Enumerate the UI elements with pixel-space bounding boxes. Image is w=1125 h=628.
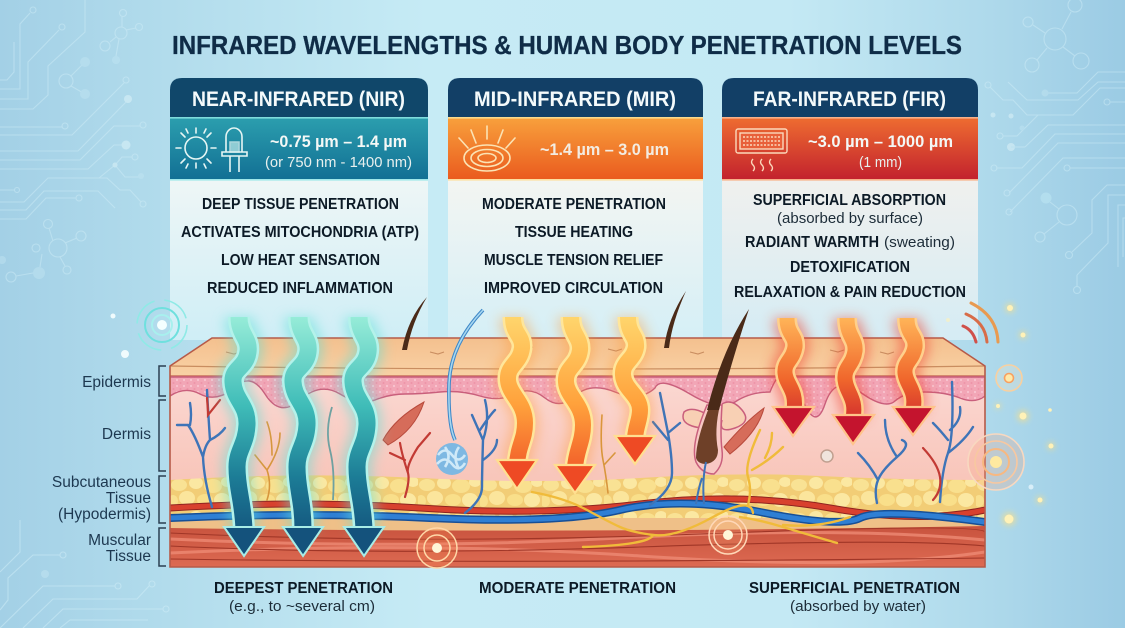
benefits list: DETOXIFICATION — [790, 259, 910, 276]
icon: sun — [176, 128, 216, 168]
heading: MIR: MID-INFRARED (MIR) — [474, 88, 676, 111]
skin surface — [170, 338, 985, 378]
heading: FIR: FAR-INFRARED (FIR) — [753, 88, 946, 111]
wavelength in nm: (or 750 nm - 1400 nm) — [265, 154, 412, 171]
arrows: near-infrared deepest penetration — [224, 317, 384, 556]
arrows: far-infrared superficial penetration — [773, 318, 934, 444]
footer: deepest penetration — [214, 580, 393, 615]
decorative circuit lines left — [0, 0, 146, 282]
hairs — [402, 291, 749, 410]
label: subcutaneous tissue — [52, 474, 151, 523]
arrow 1 — [773, 318, 814, 436]
footer: superficial penetration: (absorbed by water) — [790, 598, 926, 615]
decorative circuit lines right — [985, 0, 1125, 294]
panel: near-infrared — [170, 78, 428, 340]
icon: heater — [736, 129, 787, 171]
panel: far-infrared — [722, 78, 978, 340]
benefits list: IMPROVED CIRCULATION — [484, 280, 663, 297]
dermis — [170, 378, 985, 488]
footer: superficial penetration: SUPERFICIAL PENETRATION — [749, 580, 960, 597]
arrow 2 — [283, 317, 323, 556]
benefits list: RELAXATION & PAIN REDUCTION — [734, 284, 966, 301]
wavelength in mm: (1 mm) — [859, 154, 902, 171]
wavelength range: ~1.4 µm – 3.0 µm — [540, 140, 669, 159]
blood vessels — [170, 499, 985, 517]
icon: cyan energy rings — [110, 300, 187, 358]
layer brackets — [159, 366, 166, 566]
subcutaneous fat — [170, 474, 984, 518]
footer: superficial penetration — [749, 580, 960, 615]
icon: muscle energy spot right — [709, 516, 747, 554]
arrector muscle left — [383, 402, 424, 445]
dermal capillaries red — [207, 398, 940, 500]
wavelength range: ~0.75 µm – 1.4 µm — [270, 132, 407, 151]
benefits list: MUSCLE TENSION RELIEF — [484, 252, 663, 269]
icon: heat signal arcs — [963, 303, 998, 342]
label: epidermis: Epidermis — [82, 374, 151, 391]
arrow 3 — [893, 318, 934, 435]
glowing particles — [946, 303, 1055, 526]
benefits list: TISSUE HEATING — [515, 224, 633, 241]
arrow 1 — [497, 317, 537, 489]
benefits list — [181, 196, 419, 297]
label: subcutaneous tissue: Subcutaneous — [52, 474, 151, 491]
wavelength range: ~3.0 µm – 1000 µm — [808, 132, 953, 151]
layer labels — [52, 366, 166, 566]
epidermis wavy band — [170, 378, 984, 416]
benefits list: ACTIVATES MITOCHONDRIA (ATP) — [181, 224, 419, 241]
label: muscular tissue — [88, 532, 151, 565]
arrow 1 — [224, 317, 264, 556]
arrows: mid-infrared moderate penetration — [497, 317, 655, 493]
sebaceous glands — [683, 409, 708, 428]
label: subcutaneous tissue: (Hypodermis) — [58, 506, 151, 523]
arrow 2 — [555, 317, 595, 493]
icon: LED — [222, 128, 247, 172]
dermal capillaries blue — [177, 382, 973, 513]
hair follicle — [694, 405, 722, 474]
label: subcutaneous tissue: Tissue — [106, 490, 151, 507]
panel: mid-infrared — [448, 78, 703, 340]
arrector muscle right — [724, 408, 764, 454]
dermal nerve green — [328, 407, 334, 500]
benefits list: SUPERFICIAL ABSORPTION — [753, 192, 946, 209]
muscle — [170, 526, 985, 567]
icon: heat rings — [459, 126, 515, 171]
nerves — [532, 430, 850, 547]
benefits list — [734, 192, 966, 301]
arrow 3 — [615, 317, 655, 464]
arrow 2 — [833, 318, 874, 444]
dermal nerves orange — [255, 415, 615, 500]
benefits list: (absorbed by surface) — [777, 210, 923, 227]
benefits list — [482, 196, 666, 297]
label: dermis: Dermis — [102, 426, 151, 443]
benefits list: MODERATE PENETRATION — [482, 196, 666, 213]
tan fascia band — [170, 518, 985, 532]
icon: muscle energy spot left — [417, 528, 457, 568]
dermal cyst — [821, 450, 833, 462]
footer: moderate penetration: MODERATE PENETRATION — [479, 580, 676, 597]
benefits list: (sweating) — [884, 234, 955, 251]
footer: deepest penetration: DEEPEST PENETRATION — [214, 580, 393, 597]
footer: deepest penetration: (e.g., to ~several cm) — [229, 598, 375, 615]
block outline — [170, 338, 985, 567]
benefits list: REDUCED INFLAMMATION — [207, 280, 393, 297]
skin cross-section — [170, 291, 985, 567]
benefits list: DEEP TISSUE PENETRATION — [202, 196, 399, 213]
arrow 3 — [344, 317, 384, 556]
label: muscular tissue: Tissue — [106, 548, 151, 565]
icon: heat rings right — [968, 365, 1024, 490]
title: INFRARED WAVELENGTHS & HUMAN BODY PENETRATION LEVELS — [172, 32, 962, 60]
sweat gland — [436, 310, 483, 475]
heading: NIR: NEAR-INFRARED (NIR) — [192, 88, 405, 111]
benefits list: LOW HEAT SENSATION — [221, 252, 380, 269]
decorative circuit lines bottom left — [0, 520, 169, 628]
label: muscular tissue: Muscular — [88, 532, 151, 549]
benefits list: RADIANT WARMTH — [745, 234, 879, 251]
